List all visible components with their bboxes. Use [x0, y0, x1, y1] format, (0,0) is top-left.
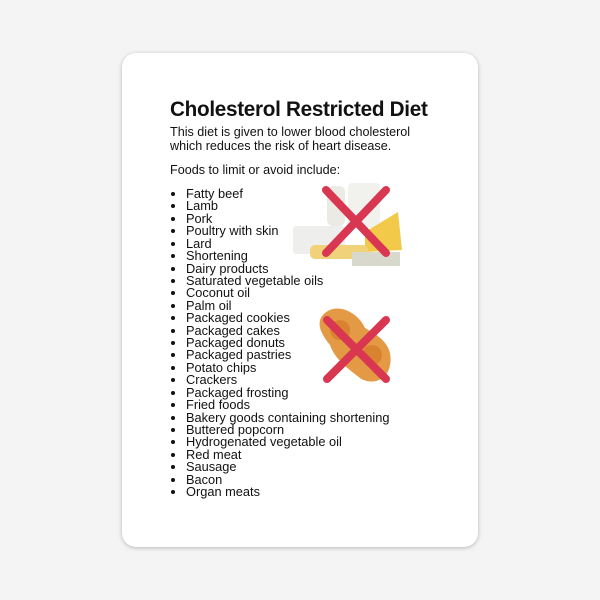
food list: Packaged cookies [186, 310, 290, 325]
food list: Organ meats [186, 484, 260, 499]
food list: Packaged frosting [186, 385, 288, 400]
food list: Pork [186, 211, 212, 226]
food list: Packaged donuts [186, 335, 285, 350]
food list: Lard [186, 236, 212, 251]
food list: Bakery goods containing shortening [186, 410, 389, 425]
title: Cholesterol Restricted Diet [170, 98, 428, 121]
food list [171, 186, 389, 499]
food list: Bacon [186, 472, 222, 487]
intro text [170, 125, 410, 153]
subheading: Foods to limit or avoid include: [170, 163, 340, 177]
food list: Sausage [186, 459, 237, 474]
food list: Lamb [186, 198, 218, 213]
food list: Saturated vegetable oils [186, 273, 323, 288]
food list: Potato chips [186, 360, 256, 375]
food list: Fatty beef [186, 186, 243, 201]
food list: Packaged cakes [186, 323, 280, 338]
food list: Red meat [186, 447, 241, 462]
food list: Coconut oil [186, 285, 250, 300]
food list: Hydrogenated vegetable oil [186, 434, 342, 449]
food list: Fried foods [186, 397, 250, 412]
intro text: which reduces the risk of heart disease. [170, 139, 391, 153]
food list: Buttered popcorn [186, 422, 284, 437]
food list: Poultry with skin [186, 223, 278, 238]
food list: Dairy products [186, 261, 268, 276]
intro text: This diet is given to lower blood cholesterol [170, 125, 410, 139]
food list: Palm oil [186, 298, 232, 313]
food list: Crackers [186, 372, 237, 387]
food list: Shortening [186, 248, 248, 263]
food list: Packaged pastries [186, 347, 291, 362]
card [122, 53, 478, 547]
